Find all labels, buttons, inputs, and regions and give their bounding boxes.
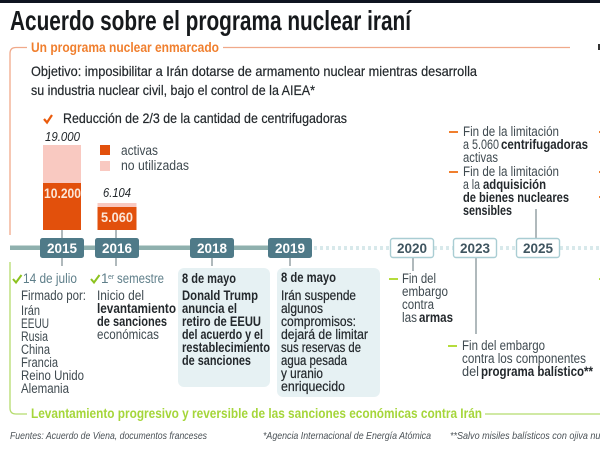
panel: 2018 card bbox=[178, 268, 270, 387]
2015 column: EEUU bbox=[21, 316, 49, 331]
icon: orange check bbox=[44, 115, 52, 122]
panel: 2019 card: enriquecido bbox=[281, 379, 345, 394]
legend bbox=[100, 143, 189, 173]
2020 note: las bbox=[402, 310, 417, 325]
year 2019: 2019 bbox=[275, 241, 305, 256]
year 2023 bbox=[454, 238, 496, 258]
green heading: Levantamiento progresivo y reversible de las sanciones económicas contra Irán bbox=[31, 405, 482, 421]
2020 note: contra bbox=[402, 297, 434, 312]
footnote IAEA: *Agencia Internacional de Energía Atómica bbox=[263, 430, 431, 442]
orange heading: Un programa nuclear enmarcado bbox=[31, 39, 219, 55]
2016 column bbox=[91, 271, 176, 342]
2016 column: er bbox=[108, 274, 115, 281]
bar 2016 bbox=[98, 185, 136, 230]
2025 notes: sensibles bbox=[463, 203, 512, 218]
panel: 2018 card: Donald Trump bbox=[182, 288, 258, 303]
footer sources: Fuentes: Acuerdo de Viena, documentos franceses bbox=[10, 430, 208, 442]
panel: 2019 card: y uranio bbox=[281, 366, 323, 381]
bar 2015 bbox=[43, 129, 81, 230]
2015 column: Firmado por: bbox=[21, 288, 86, 303]
2025 notes: Fin de la limitación bbox=[463, 164, 559, 179]
panel: green frame bbox=[10, 262, 600, 414]
year 2015 bbox=[40, 238, 84, 258]
2015 column: Rusia bbox=[21, 329, 48, 344]
panel: 2019 card: dejará de limitar bbox=[281, 327, 368, 342]
legend: activas bbox=[121, 143, 158, 158]
bar 2016: 6.104 bbox=[103, 185, 131, 200]
2025 notes: a la bbox=[463, 177, 480, 192]
panel: 2018 card: de sanciones bbox=[182, 353, 251, 368]
2016 column: económicas bbox=[97, 327, 159, 342]
2015 column: China bbox=[21, 342, 50, 357]
objective text bbox=[31, 63, 477, 98]
panel: 2019 card: compromisos: bbox=[281, 314, 356, 329]
panel: 2019 card: 8 de mayo bbox=[281, 270, 336, 285]
panel: 2019 card: agua pesada bbox=[281, 353, 347, 368]
2023 note: Fin del embargo bbox=[462, 338, 545, 353]
2015 column: Reino Unido bbox=[21, 368, 84, 383]
2016 column: semestre bbox=[117, 271, 164, 286]
2020 note: Fin del bbox=[402, 271, 436, 286]
bar 2015: 10.200 bbox=[44, 186, 81, 201]
2025 notes: Fin de la limitación bbox=[463, 124, 559, 139]
centrifuge heading: Reducción de 2/3 de la cantidad de centrifugadoras bbox=[63, 110, 347, 126]
2025 notes: activas bbox=[463, 150, 498, 165]
2020 note: embargo bbox=[402, 284, 448, 299]
bar chart bbox=[43, 129, 136, 230]
panel: 2019 card: sus reservas de bbox=[281, 340, 361, 355]
year 2015: 2015 bbox=[47, 241, 78, 256]
year 2023: 2023 bbox=[460, 241, 491, 256]
2015 column bbox=[13, 271, 86, 396]
panel: orange frame bbox=[10, 48, 570, 235]
year 2025: 2025 bbox=[523, 241, 554, 256]
2016 column: de sanciones bbox=[97, 314, 167, 329]
2016 column: 1 bbox=[101, 271, 109, 286]
right edge cropped marks bbox=[598, 44, 600, 280]
year 2025 bbox=[516, 238, 560, 258]
year 2020 bbox=[390, 238, 434, 258]
2025 notes: a 5.060 bbox=[463, 137, 499, 152]
2016 column: Inicio del bbox=[97, 288, 144, 303]
timeline bbox=[10, 209, 600, 334]
2015 column: Alemania bbox=[21, 381, 69, 396]
2016 column: levantamiento bbox=[97, 301, 176, 316]
panel: 2019 card bbox=[277, 268, 380, 397]
year 2020: 2020 bbox=[397, 241, 427, 256]
bar 2015: 19.000 bbox=[45, 129, 81, 144]
year 2018 bbox=[190, 238, 234, 258]
legend: no utilizadas bbox=[121, 158, 189, 173]
2025 notes: adquisición bbox=[483, 177, 546, 192]
year 2016 bbox=[95, 238, 139, 258]
title: Acuerdo sobre el programa nuclear iraní bbox=[10, 5, 412, 36]
2015 column: 14 de julio bbox=[23, 271, 77, 286]
2025 notes bbox=[449, 124, 588, 218]
panel: 2018 card: 8 de mayo bbox=[182, 271, 236, 286]
year 2018: 2018 bbox=[197, 241, 228, 256]
2025 notes: centrifugadoras bbox=[501, 137, 588, 152]
2020 note: armas bbox=[419, 310, 453, 325]
2023 note bbox=[448, 338, 594, 379]
objective text: su industria nuclear civil, bajo el control de la AIEA* bbox=[31, 82, 315, 98]
objective text: Objetivo: imposibilitar a Irán dotarse de armamento nuclear mientras desarrolla bbox=[31, 63, 477, 79]
2015 column: Irán bbox=[21, 303, 40, 318]
2023 note: del bbox=[462, 364, 479, 379]
panel: 2018 card: del acuerdo y el bbox=[182, 327, 263, 342]
2025 notes: de bienes nucleares bbox=[463, 190, 569, 205]
year 2016: 2016 bbox=[102, 241, 133, 256]
panel: 2018 card: anuncia el bbox=[182, 301, 237, 316]
2015 column: Francia bbox=[21, 355, 58, 370]
top bar bbox=[0, 0, 600, 3]
panel: 2018 card: retiro de EEUU bbox=[182, 314, 261, 329]
panel: 2019 card: algunos bbox=[281, 301, 323, 316]
2020 note bbox=[389, 271, 453, 325]
panel: 2019 card: Irán suspende bbox=[281, 288, 356, 303]
year 2019 bbox=[268, 238, 312, 258]
bar 2016: 5.060 bbox=[101, 210, 133, 225]
panel: 2018 card: restablecimiento bbox=[182, 340, 270, 355]
